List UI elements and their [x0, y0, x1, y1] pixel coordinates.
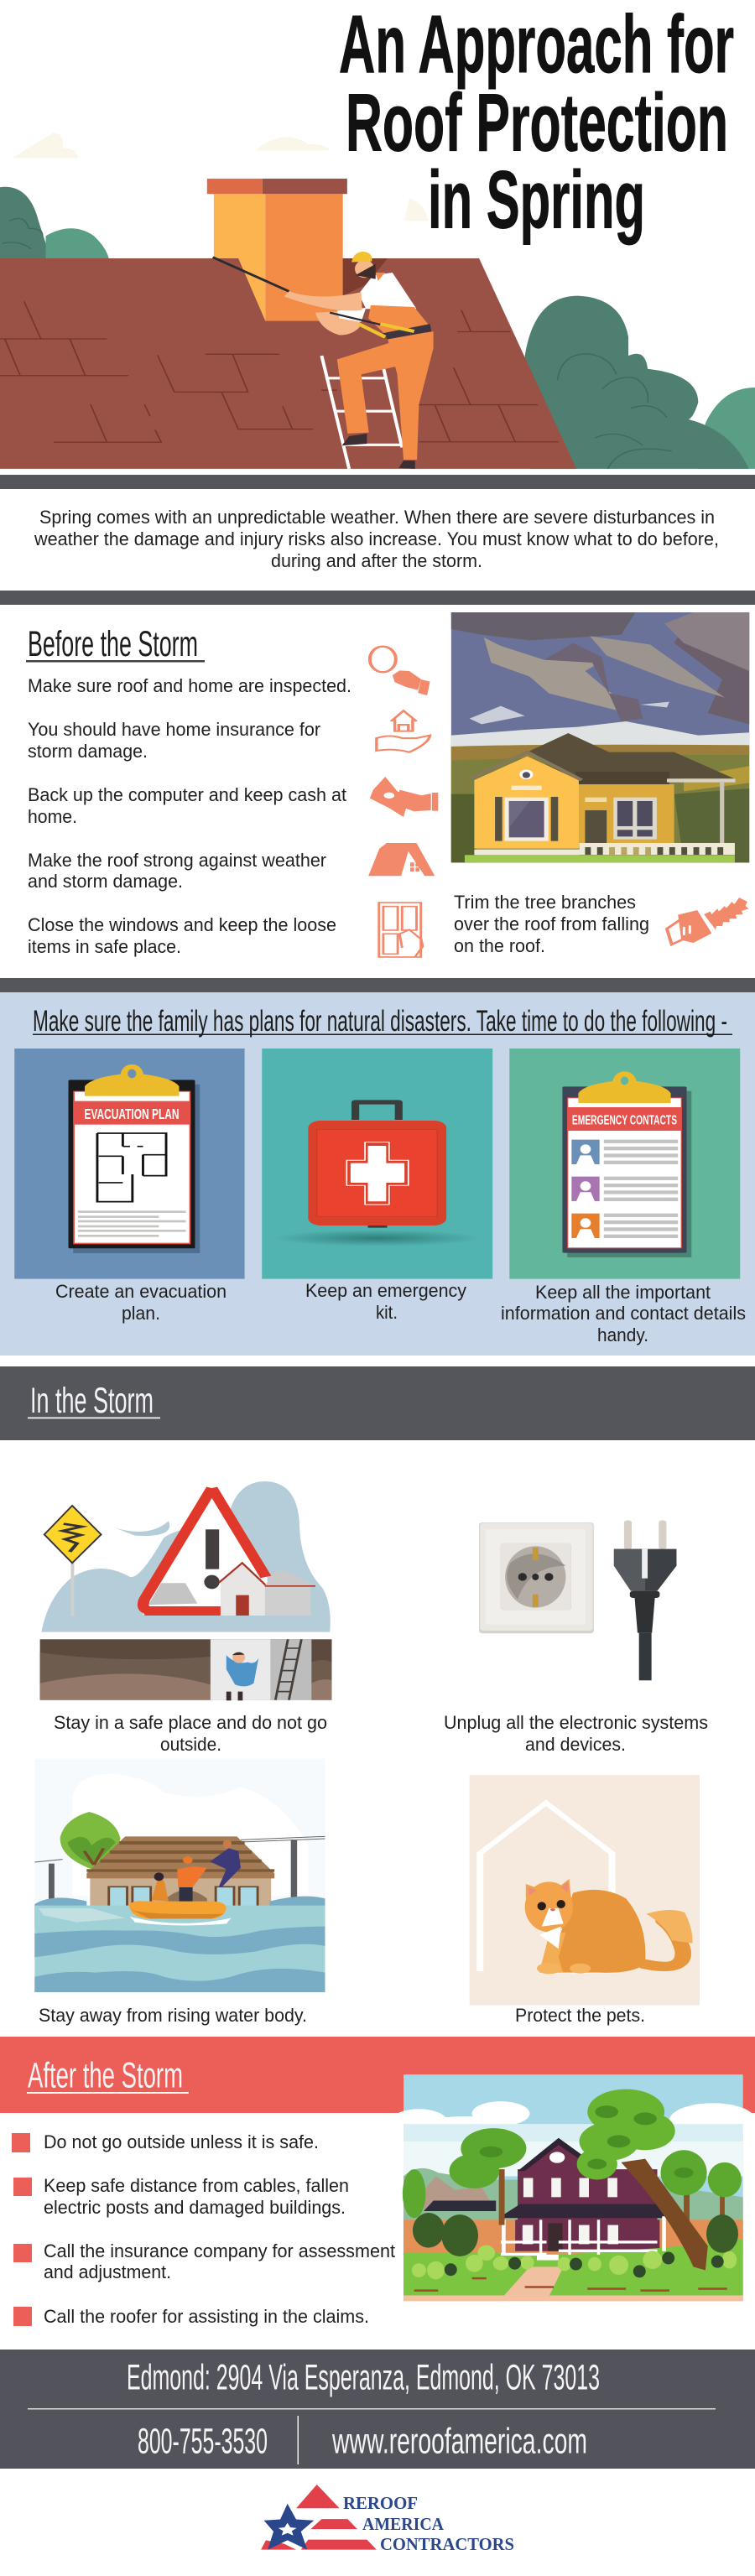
checklist: before the storm: storm damage. — [28, 741, 148, 762]
footer: contact details: 800-755-3530 — [138, 2421, 268, 2461]
bullet: safe distance — [13, 2175, 349, 2218]
panel: family plans — [0, 992, 755, 1356]
bullet: safe distance: electric posts and damaged buildings. — [44, 2197, 346, 2218]
illustration: shelter from tornado — [40, 1481, 331, 1700]
footer: contact details: www.reroofamerica.com — [331, 2421, 587, 2461]
heading: before the storm: Before the Storm — [28, 624, 198, 664]
checklist: before the storm: Make the roof strong against weather — [28, 850, 326, 871]
bullet: roofer: Call the roofer for assisting in the claims. — [44, 2306, 369, 2327]
title — [339, 0, 734, 245]
header: after the storm: After the Storm — [28, 2055, 183, 2095]
checklist: before the storm: home. — [28, 806, 77, 827]
bullet: stay inside: Do not go outside unless it is safe. — [44, 2131, 319, 2152]
intro text: during and after the storm. — [271, 550, 482, 571]
photo: house with fallen tree — [390, 2074, 755, 2301]
dark band above before the storm — [0, 591, 755, 605]
dark band above plans — [0, 978, 755, 992]
card: emergency contacts — [509, 1049, 740, 1279]
icon: cash in hand — [370, 777, 438, 817]
icon: chainsaw — [667, 898, 749, 945]
panel: before the storm — [26, 612, 749, 957]
ladder — [321, 356, 402, 469]
icon: magnifier in hand — [370, 647, 430, 695]
footer: contact details — [0, 2350, 755, 2469]
panel: in the storm — [0, 1366, 755, 2026]
captions: family plans — [55, 1280, 746, 1345]
bullet: insurance: and adjustment. — [44, 2261, 171, 2282]
captions: family plans: kit. — [376, 1302, 398, 1323]
icon: house in hand — [377, 710, 430, 752]
tip: trim tree branches: on the roof. — [454, 935, 545, 956]
caption: safe place — [54, 1712, 327, 1755]
header: in the storm: In the Storm — [30, 1381, 154, 1421]
card: evacuation plan — [14, 1049, 245, 1279]
illustration: cat at home — [470, 1775, 700, 2006]
caption: unplug: and devices. — [525, 1734, 626, 1755]
intro text: weather the damage and injury risks also increase. You must know what to do before, — [34, 528, 719, 549]
card: evacuation plan: EVACUATION PLAN — [84, 1106, 180, 1122]
caption: unplug — [444, 1712, 708, 1755]
captions: family plans: information and contact details — [501, 1303, 746, 1324]
checklist: before the storm: items in safe place. — [28, 936, 181, 957]
checklist: before the storm: and storm damage. — [28, 871, 183, 892]
icon: closing window — [379, 903, 423, 957]
header: in the storm — [0, 1366, 755, 1440]
tip: trim tree branches: over the roof from falling — [454, 913, 649, 934]
checklist: before the storm: Close the windows and keep the loose — [28, 914, 336, 935]
captions: family plans: Keep an emergency — [305, 1280, 466, 1301]
card: emergency kit — [262, 1049, 492, 1279]
tip: trim tree branches — [454, 892, 649, 956]
caption: protect pets: Protect the pets. — [515, 2005, 645, 2026]
logo: reroof america contractors: AMERICA — [362, 2514, 445, 2534]
caption: unplug: Unplug all the electronic systems — [444, 1712, 708, 1733]
captions: family plans: handy. — [597, 1324, 648, 1345]
panel: after the storm — [0, 2037, 755, 2327]
worker — [213, 252, 434, 469]
intro text: Spring comes with an unpredictable weather. When there are severe disturbances in — [39, 507, 715, 528]
caption: safe place: Stay in a safe place and do not go — [54, 1712, 327, 1733]
logo: reroof america contractors: CONTRACTORS — [380, 2534, 514, 2554]
tip: trim tree branches: Trim the tree branches — [454, 892, 636, 913]
bullet: safe distance: Keep safe distance from cables, fallen — [44, 2175, 349, 2196]
photo: house under storm clouds — [451, 612, 749, 862]
checklist: before the storm — [28, 675, 351, 957]
caption: safe place: outside. — [160, 1734, 221, 1755]
bullet list: after the storm — [12, 2131, 395, 2327]
header: after the storm — [0, 2037, 755, 2113]
hero illustration: roofer on roof — [0, 133, 755, 469]
logo: reroof america contractors — [261, 2485, 514, 2554]
checklist: before the storm: You should have home insurance for — [28, 719, 320, 740]
logo: reroof america contractors: REROOF — [343, 2493, 418, 2513]
captions: family plans: Keep all the important — [535, 1282, 711, 1303]
bullet: insurance — [13, 2240, 395, 2282]
illustration: socket and plug — [479, 1520, 676, 1680]
caption: rising water: Stay away from rising water body. — [39, 2005, 307, 2026]
illustration: flood rescue — [34, 1759, 325, 1992]
checklist: before the storm: Make sure roof and home are inspected. — [28, 675, 351, 696]
captions: family plans: plan. — [122, 1303, 160, 1324]
intro text — [34, 507, 719, 571]
checklist: before the storm: Back up the computer and keep cash at — [28, 784, 346, 805]
icon: roof — [368, 843, 435, 876]
captions: family plans: Create an evacuation — [55, 1281, 226, 1302]
bullet: insurance: Call the insurance company for assessment — [44, 2240, 395, 2261]
top dark band — [0, 475, 755, 489]
